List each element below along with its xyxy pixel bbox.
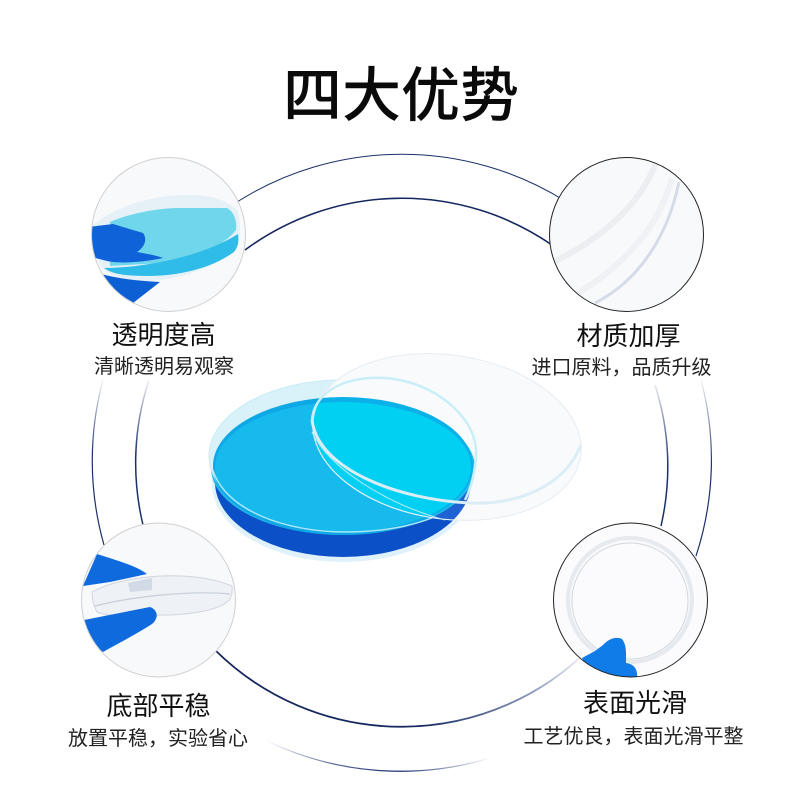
lid lower edge <box>312 432 445 520</box>
panel: thicker material <box>532 158 712 379</box>
heading: 材质加厚 <box>576 321 681 351</box>
heading: 表面光滑 <box>583 688 687 718</box>
lid thick front rim <box>312 420 581 503</box>
lid outline <box>302 337 592 537</box>
dish rim <box>209 380 475 532</box>
glove upper <box>88 224 163 262</box>
glove lower <box>101 274 160 303</box>
image circle: dish edge closeup <box>550 158 704 312</box>
title: 四大优势 <box>283 63 519 129</box>
subtext: 放置平稳，实验省心 <box>68 727 248 750</box>
glove <box>582 638 637 678</box>
image circle: hand holding dish from above <box>554 523 708 678</box>
image circle: hand holding blue dish <box>88 158 246 312</box>
cyan dish wall <box>211 401 475 535</box>
main petri dish illustration <box>209 337 592 562</box>
panel: high transparency <box>88 158 246 378</box>
glove lower <box>84 607 157 652</box>
panel: smooth surface <box>524 523 744 748</box>
glove upper <box>83 554 147 586</box>
heading: 底部平稳 <box>106 691 211 721</box>
liquid surface <box>213 397 473 535</box>
liquid side band <box>104 234 238 276</box>
lid over the dish <box>310 353 582 521</box>
front rim highlight <box>213 470 445 532</box>
subtext: 清晰透明易观察 <box>94 355 234 378</box>
clear dish <box>92 576 232 616</box>
image circle: hand holding clear dish <box>82 523 236 677</box>
dish body <box>92 195 240 281</box>
panel: stable base <box>68 523 248 750</box>
lid ring behind <box>312 378 476 500</box>
dish base <box>212 406 474 562</box>
decorative concentric ring arcs <box>92 154 711 771</box>
subtext: 工艺优良，表面光滑平整 <box>524 725 744 748</box>
dark blue liquid side <box>215 407 471 557</box>
heading: 透明度高 <box>111 320 216 350</box>
liquid <box>110 208 236 266</box>
subtext: 进口原料，品质升级 <box>532 356 712 379</box>
